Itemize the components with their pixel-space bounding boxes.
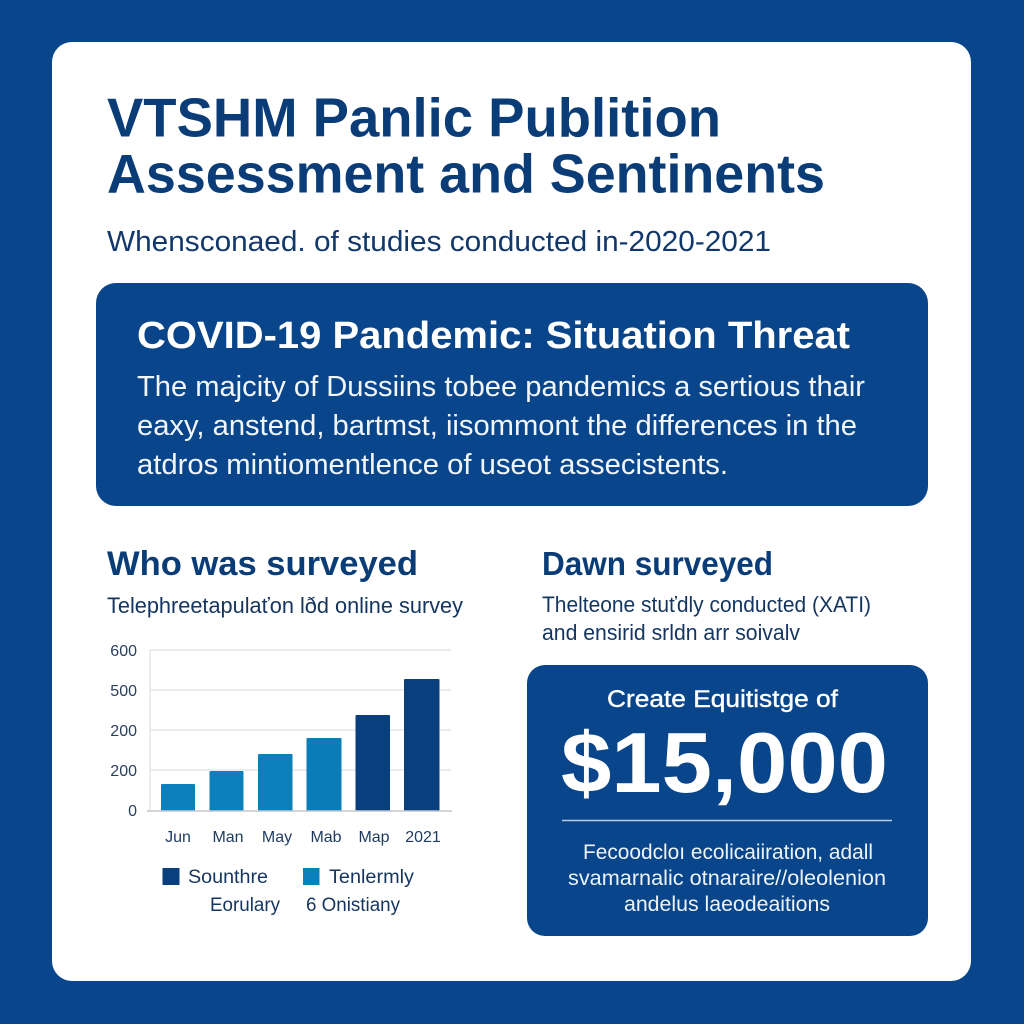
text: survey method left: Telephreetapulaťon lðd online survey: [107, 593, 463, 618]
x axis labels: Mab: [310, 829, 342, 846]
callout body text: andelus laeodeaitions: [624, 893, 830, 916]
bar chart: [110, 643, 452, 846]
y axis labels: 200: [110, 723, 137, 740]
callout heading: Create Equitistge of: [607, 686, 838, 713]
y axis labels: 200: [110, 763, 137, 780]
panel: situation threat: [96, 283, 928, 506]
panel body text: [137, 371, 865, 481]
x axis labels: May: [262, 829, 292, 846]
heading: dawn surveyed: Dawn surveyed: [542, 545, 773, 582]
y axis labels: [110, 643, 137, 820]
callout body text: svamarnalic otnaraire//oleolenion: [568, 867, 886, 890]
legend: Sounthre: [188, 867, 268, 888]
panel body text: atdros mintiomentlence of useot assecistents.: [137, 449, 728, 481]
panel: funding callout: [527, 665, 928, 936]
legend: 6 Onistiany: [306, 895, 400, 916]
heading: who was surveyed: Who was surveyed: [107, 545, 418, 583]
text: survey method right: and ensirid srldn arr soivalv: [542, 620, 800, 645]
panel heading: COVID-19 Pandemic: Situation Threat: [137, 315, 850, 357]
panel body text: The majcity of Dussiins tobee pandemics a sertious thair: [137, 371, 865, 403]
text: survey method right: Thelteone stuťdly conducted (XATI): [542, 592, 871, 617]
y axis labels: 600: [110, 643, 137, 660]
legend: [162, 867, 415, 916]
subtitle: Whensconaed. of studies conducted in-2020-2021: [107, 226, 771, 258]
title: VTSHM Panlic Publition: [107, 86, 721, 148]
x axis labels: 2021: [405, 829, 441, 846]
callout body text: [568, 841, 886, 916]
legend: Tenlermly: [329, 867, 415, 888]
bars: [161, 679, 440, 811]
x axis labels: Man: [212, 829, 244, 846]
title: [107, 86, 825, 204]
title: Assessment and Sentinents: [107, 142, 825, 204]
y axis labels: 500: [110, 683, 137, 700]
x axis labels: Jun: [165, 829, 191, 846]
text: survey method right: [542, 592, 871, 645]
panel body text: eaxy, anstend, bartmst, iisommont the differences in the: [137, 410, 857, 442]
legend: Eorulary: [210, 895, 280, 916]
x axis labels: Map: [358, 829, 390, 846]
callout body text: Fecoodcloı ecolicaiiration, adall: [583, 841, 873, 864]
x axis labels: [165, 829, 441, 846]
callout figure: $15,000: [561, 716, 888, 811]
y axis labels: 0: [128, 803, 137, 820]
